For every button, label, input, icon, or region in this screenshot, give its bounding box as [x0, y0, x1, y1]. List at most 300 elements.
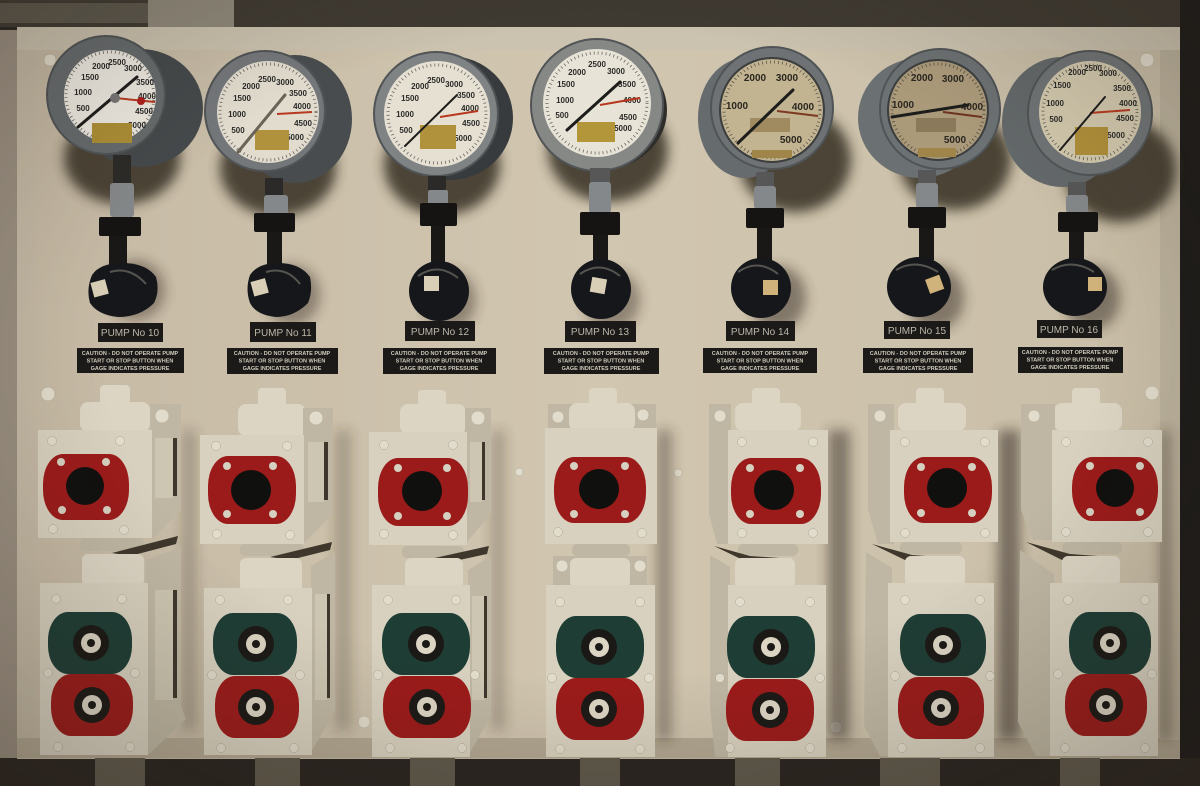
valve assembly: pump 11 [248, 178, 311, 317]
nut [746, 208, 784, 228]
start housing side [710, 555, 730, 757]
coupling [80, 536, 178, 556]
start plate [382, 613, 470, 675]
gauge scale: 2000 [568, 68, 586, 77]
start housing face [204, 588, 312, 755]
gauge scale: 3500 [289, 89, 307, 98]
rivets [374, 440, 480, 752]
caution plate: pump 13 [544, 348, 659, 374]
gauge scale: 1000 [228, 110, 246, 119]
caution plate: pump 16: GAGE INDICATES PRESSURE [1031, 365, 1110, 371]
gauge scale: 2500 [427, 76, 445, 85]
gauge rim [888, 60, 988, 160]
gauge scale: 3000 [942, 74, 965, 85]
valve assembly: pump 16 [1043, 182, 1107, 316]
stop button [579, 469, 619, 509]
valve highlight [110, 270, 146, 284]
gauge scale: 3000 [276, 78, 294, 87]
caution plate: pump 10: START OR STOP BUTTON WHEN [87, 358, 173, 364]
gauge scale: 1000 [396, 110, 414, 119]
rivets [890, 438, 994, 752]
control station: pump 15 [864, 388, 998, 757]
caution plate: pump 15: START OR STOP BUTTON WHEN [875, 358, 961, 364]
buttons [923, 627, 961, 726]
buttons [238, 626, 274, 725]
shaft [757, 228, 772, 260]
gauge scale [66, 52, 156, 140]
gauge scale: 4500 [135, 107, 153, 116]
cast shadows [64, 98, 1176, 740]
gauge face [1039, 61, 1141, 163]
shaft [1069, 232, 1084, 260]
gauge scale: 2000 [242, 82, 260, 91]
gauge scale: 2000 [1068, 68, 1086, 77]
start housing cap [82, 554, 144, 586]
shaft [593, 235, 608, 263]
control station: pump 13 [545, 388, 657, 757]
gauge scale: 1500 [557, 80, 575, 89]
gauge: pump 13 [531, 39, 667, 171]
nameplate: pump 12: PUMP No 12 [411, 327, 470, 338]
gauge label tag [420, 125, 456, 149]
off plate [383, 676, 471, 738]
caution plate: pump 14: CAUTION - DO NOT OPERATE PUMP [712, 351, 809, 357]
start housing face [888, 583, 994, 757]
caution plate: pump 13: START OR STOP BUTTON WHEN [558, 358, 644, 364]
rivets [1054, 438, 1156, 752]
gauge shell [387, 56, 513, 180]
start housing side [311, 552, 335, 752]
start housing ears [553, 556, 647, 586]
stop housing cap [80, 385, 150, 432]
start housing cap [405, 558, 463, 590]
caution plate: pump 13: CAUTION - DO NOT OPERATE PUMP [553, 351, 650, 357]
valve body [409, 261, 469, 321]
gauge scale: 3000 [445, 80, 463, 89]
gauge face [64, 50, 156, 142]
buttons [73, 625, 110, 723]
gauge rim [720, 58, 824, 162]
gauge scale: 4000 [792, 102, 815, 113]
caution plate: pump 12: START OR STOP BUTTON WHEN [396, 358, 482, 364]
conduits below panel [95, 758, 1100, 786]
stop button [231, 470, 271, 510]
nameplate: pump 13 [565, 321, 636, 342]
nameplate: pump 15 [884, 321, 950, 339]
off plate [726, 679, 814, 741]
valve assembly: pump 14 [731, 172, 791, 318]
gauge scale: 3000 [776, 73, 799, 84]
gauge shell [77, 49, 203, 167]
start housing face [372, 585, 470, 757]
stop housing side [150, 404, 181, 540]
stop housing ears [548, 404, 656, 430]
caution plate: pump 11: START OR STOP BUTTON WHEN [239, 358, 325, 364]
gauge scale: 500 [555, 111, 569, 120]
start housing side [864, 552, 892, 756]
gauge red hand [1090, 110, 1130, 113]
gauge scale: 1000 [556, 96, 574, 105]
gauge scale: 2000 [911, 73, 934, 84]
off plate [1065, 674, 1147, 736]
stop housing cap [400, 390, 466, 434]
gauge needle [78, 77, 137, 127]
gauge: pump 15 [858, 49, 1000, 178]
gauge face [721, 59, 823, 161]
valve highlight [418, 269, 458, 278]
stem [113, 155, 131, 185]
gauge scale: 4000 [1119, 99, 1137, 108]
gauge scale: 2500 [588, 60, 606, 69]
gauge scale: 1000 [726, 101, 749, 112]
collar [264, 195, 288, 215]
nameplate: pump 12 [405, 321, 475, 341]
stop button [402, 471, 442, 511]
gauge scale [220, 64, 316, 160]
shaft [919, 228, 934, 260]
gauge scale: 4000 [623, 96, 641, 105]
gauge shell [1002, 57, 1122, 187]
control station: pump 16 [1018, 388, 1162, 756]
stop housing face [369, 432, 467, 545]
gauge scale: 4500 [294, 119, 312, 128]
gauge scale: 500 [399, 126, 413, 135]
start plate [556, 616, 644, 678]
control station: pump 10 [38, 385, 186, 755]
collar [916, 183, 938, 208]
valve stem square [424, 276, 439, 291]
gauge scale: 2500 [1084, 64, 1102, 73]
gauge face [889, 61, 987, 159]
caution plate: pump 10 [77, 348, 184, 373]
gauge scale: 5000 [1107, 131, 1125, 140]
stop button [66, 467, 104, 505]
gauge scale: 5000 [780, 135, 803, 146]
gauge scale [892, 64, 984, 156]
gauge scale: 1000 [1046, 99, 1064, 108]
valve body [887, 257, 951, 317]
gauge face [384, 61, 490, 167]
caution plate: pump 11: GAGE INDICATES PRESSURE [243, 366, 322, 372]
coupling [402, 546, 489, 562]
nut [580, 212, 620, 235]
stop housing cap [238, 388, 306, 436]
collar [589, 182, 611, 213]
nameplate: pump 16: PUMP No 16 [1040, 325, 1099, 336]
gauge: pump 10 [47, 36, 203, 167]
gauge: pump 12 [374, 52, 513, 180]
caution plate: pump 13: GAGE INDICATES PRESSURE [562, 366, 641, 372]
nameplate: pump 10 [98, 323, 163, 342]
rivets [716, 438, 824, 752]
stop plate [1072, 457, 1158, 521]
stem [428, 176, 446, 192]
buttons [752, 629, 789, 728]
valve stem square [90, 279, 109, 298]
nameplate: pump 13: PUMP No 13 [571, 327, 630, 338]
gauge scale: 1500 [1053, 81, 1071, 90]
control station: pump 14 [709, 388, 828, 757]
nut [420, 203, 457, 226]
start housing cap [735, 558, 795, 588]
gauge scale: 5000 [614, 124, 632, 133]
gauge scale: 2500 [258, 75, 276, 84]
stem [265, 178, 283, 198]
caution plate: pump 11 [227, 348, 338, 374]
stem [918, 170, 936, 186]
nameplate: pump 10: PUMP No 10 [101, 328, 160, 339]
collar [428, 190, 448, 204]
gauge scale: 4500 [462, 119, 480, 128]
caution plate: pump 12: CAUTION - DO NOT OPERATE PUMP [391, 351, 488, 357]
start housing cap [240, 558, 302, 592]
gauge label tag [916, 118, 956, 132]
start plate [48, 612, 132, 674]
stop housing face [890, 430, 998, 542]
collar [754, 186, 776, 209]
gauge shell [533, 50, 667, 170]
stop plate [731, 458, 821, 524]
stop button [754, 470, 794, 510]
gauge needle [1060, 97, 1105, 150]
stop housing cap [735, 388, 801, 431]
gauge scale: 4000 [961, 102, 984, 113]
gauge shell [238, 55, 352, 183]
valve stem square [763, 280, 778, 295]
caution plate: pump 11: CAUTION - DO NOT OPERATE PUMP [234, 351, 331, 357]
gauge scale [1043, 64, 1137, 159]
valve assembly: pump 10 [88, 155, 158, 317]
caution plate: pump 15: CAUTION - DO NOT OPERATE PUMP [870, 351, 967, 357]
caution plate: pump 12 [383, 348, 496, 374]
caution plate: pump 14: GAGE INDICATES PRESSURE [721, 366, 800, 372]
off plate [51, 674, 133, 736]
start housing cap [1062, 556, 1120, 586]
gauge scale: 3000 [124, 64, 142, 73]
gauge scale: 3500 [457, 91, 475, 100]
caution plate: pump 12: GAGE INDICATES PRESSURE [400, 366, 479, 372]
stop housing face [728, 430, 828, 544]
shaft [267, 232, 282, 264]
control station: pump 12 [369, 390, 491, 757]
gauge: pump 11 [205, 51, 352, 183]
valve stem square [250, 278, 269, 297]
valve stem square [1088, 277, 1102, 291]
buttons [1089, 626, 1127, 722]
valve highlight [266, 270, 300, 284]
gauge shell [858, 58, 982, 178]
gauge scale: 5000 [286, 133, 304, 142]
stop housing side [465, 408, 491, 544]
start housing face [728, 585, 826, 757]
gauge needle [738, 90, 793, 143]
start plate [1069, 612, 1151, 674]
stop housing face [200, 435, 304, 544]
stop housing face [1052, 430, 1162, 542]
gauge bezel [711, 47, 833, 169]
caution plate: pump 10: GAGE INDICATES PRESSURE [91, 366, 170, 372]
stop housing side [1021, 404, 1055, 540]
gauge scale: 4000 [138, 92, 156, 101]
gauge scale: 500 [231, 126, 245, 135]
off plate [898, 677, 984, 739]
gauge bezel [374, 52, 498, 176]
buttons [581, 629, 617, 727]
gauge bezel [531, 39, 663, 171]
stem [590, 168, 610, 184]
valve body [1043, 258, 1107, 316]
gauge scale [388, 65, 486, 163]
gauge scale: 4000 [293, 102, 311, 111]
gauge scale: 3500 [1113, 84, 1131, 93]
start plate [213, 613, 297, 675]
valve highlight [580, 267, 620, 276]
stop button [927, 468, 967, 508]
gauge scale: 5000 [454, 134, 472, 143]
gauge scale: 5000 [128, 121, 146, 130]
off plate [215, 676, 299, 738]
stop housing side [868, 404, 894, 544]
caution plate: pump 10: CAUTION - DO NOT OPERATE PUMP [82, 351, 179, 357]
stop plate [208, 456, 296, 524]
gauge red hand [277, 112, 312, 114]
caution plate: pump 14: START OR STOP BUTTON WHEN [717, 358, 803, 364]
stem [1068, 182, 1086, 198]
collar [1066, 195, 1088, 213]
shaft [109, 236, 127, 266]
nameplate: pump 11 [250, 322, 316, 342]
gauge scale: 500 [1049, 115, 1063, 124]
stop housing cap [898, 388, 966, 431]
coupling [240, 542, 332, 560]
start housing face [546, 585, 655, 757]
gauge face [543, 49, 651, 157]
gauge needle [892, 105, 968, 117]
valve body [88, 263, 158, 317]
nut [1058, 212, 1098, 232]
gauge: pump 14 [698, 47, 833, 178]
coupling [872, 542, 962, 560]
gauge scale: 5000 [944, 135, 967, 146]
valve body [571, 259, 631, 319]
gauge scale: 4000 [461, 104, 479, 113]
nameplate: pump 15: PUMP No 15 [888, 326, 947, 337]
valve assembly: pump 13 [571, 168, 631, 319]
start housing cap [905, 556, 965, 586]
gauge scale: 2000 [744, 73, 767, 84]
gauge needle [238, 95, 285, 152]
gauge label tag [92, 123, 132, 143]
start plate [900, 614, 986, 676]
gauge scale [724, 62, 820, 158]
valve highlight [738, 265, 778, 274]
start housing side [1018, 550, 1054, 756]
gauge scale: 1500 [233, 94, 251, 103]
gauge red hand [115, 97, 155, 105]
gauge scale: 500 [76, 104, 90, 113]
gauge lower tag [918, 148, 956, 157]
start housing face [40, 583, 148, 755]
valve highlight [1052, 264, 1094, 272]
gauge scale: 1000 [74, 88, 92, 97]
nameplate: pump 16 [1037, 320, 1102, 338]
gauge needle [567, 82, 620, 130]
coupling [572, 544, 630, 560]
stop housing side [303, 408, 333, 544]
stop housing face [38, 430, 152, 538]
gauge label tag [1075, 127, 1108, 155]
collar [110, 183, 134, 217]
nut [99, 217, 141, 236]
valve assembly: pump 15 [887, 170, 951, 317]
valve body [248, 263, 311, 317]
nameplate: pump 14 [726, 321, 795, 341]
nut [908, 207, 946, 228]
gauge red hand [600, 98, 640, 105]
gauge scale: 2500 [108, 58, 126, 67]
gauge: pump 16 [1002, 51, 1152, 187]
start plate [727, 616, 815, 678]
stop housing side [709, 404, 731, 544]
start housing face [1050, 583, 1158, 756]
gauge scale: 1000 [892, 100, 915, 111]
stop housing cap [1054, 388, 1122, 431]
caution plate: pump 16 [1018, 347, 1123, 373]
gauge scale [547, 53, 647, 153]
gauge scale: 4500 [619, 113, 637, 122]
coupling [714, 544, 798, 561]
shaft [431, 226, 445, 262]
gauge needle [405, 95, 457, 146]
gauge scale: 3500 [618, 80, 636, 89]
nut [254, 213, 295, 232]
rivets [208, 442, 304, 752]
valve highlight [896, 264, 938, 272]
rivets [44, 436, 140, 752]
gauge scale: 1500 [401, 94, 419, 103]
gauge scale: 2000 [92, 62, 110, 71]
stop plate [554, 457, 646, 523]
gauge label tag [255, 130, 289, 150]
valve assembly: pump 12 [409, 176, 469, 321]
gauge shell [698, 58, 792, 178]
caution plate: pump 16: START OR STOP BUTTON WHEN [1027, 358, 1113, 364]
caution plate: pump 14 [703, 348, 817, 373]
stop housing cap [569, 388, 635, 431]
caution plate: pump 15: GAGE INDICATES PRESSURE [879, 366, 958, 372]
valve stem square [925, 275, 944, 294]
stop housing face [545, 428, 657, 544]
gauge lower tag [752, 150, 792, 158]
stop plate [904, 457, 992, 523]
nameplate: pump 11: PUMP No 11 [254, 328, 312, 339]
stop plate [43, 454, 129, 520]
nameplate: pump 14: PUMP No 14 [731, 327, 790, 338]
gauge scale: 3500 [136, 78, 154, 87]
gauge scale: 3000 [1099, 69, 1117, 78]
start housing side [146, 547, 186, 755]
start housing side [468, 556, 491, 756]
coupling [1026, 542, 1122, 560]
rivets [548, 462, 654, 754]
gauge face [217, 61, 319, 163]
start housing cap [570, 558, 630, 588]
gauge red hand [440, 111, 478, 117]
gauge bezel [47, 36, 165, 154]
gauge label tag [750, 118, 790, 132]
gauge bezel [1028, 51, 1152, 175]
gauge red hand [943, 112, 982, 117]
